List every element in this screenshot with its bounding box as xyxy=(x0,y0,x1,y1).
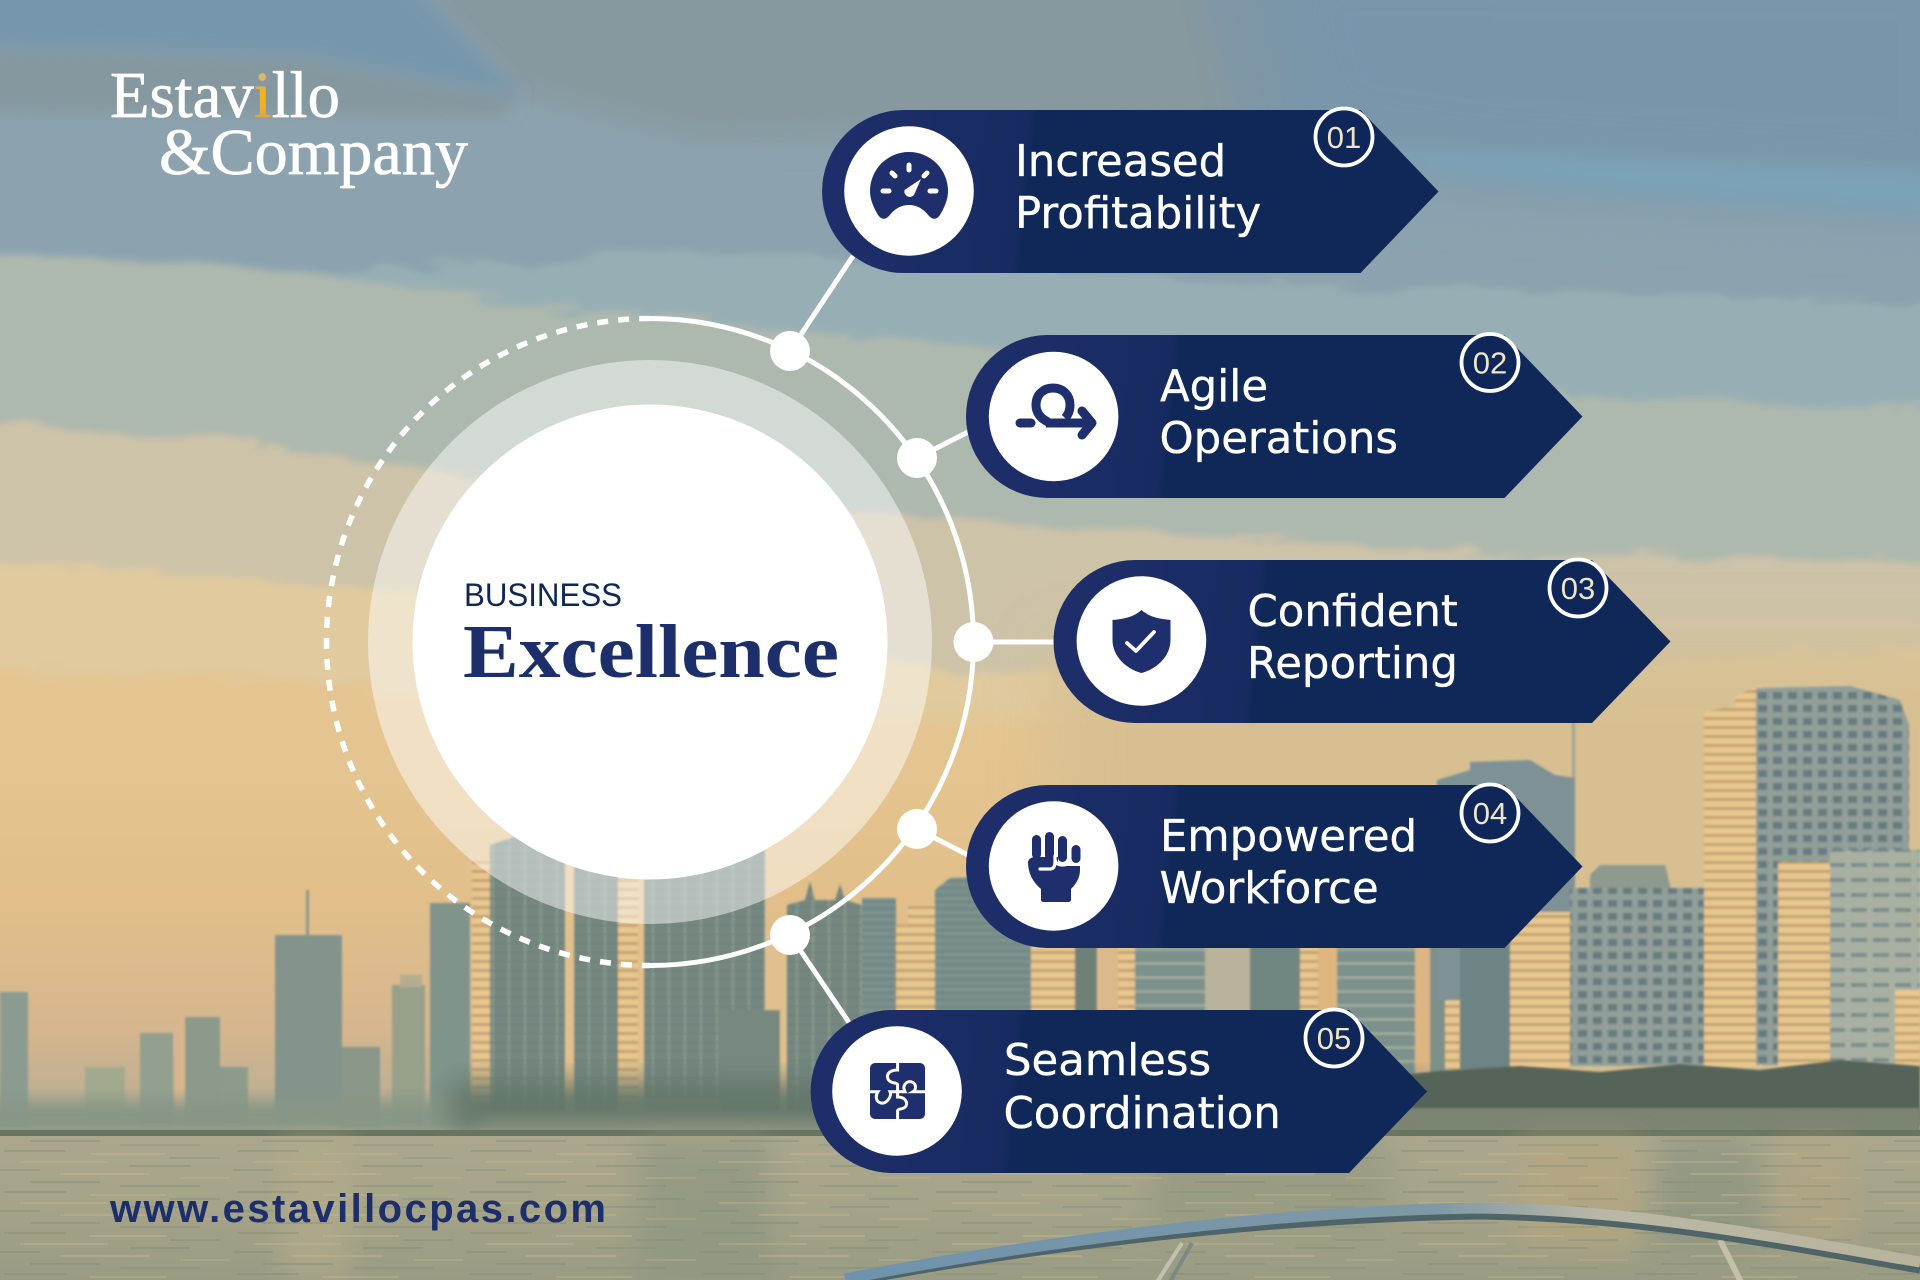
item 02: Agile Operations: Agile xyxy=(1160,362,1268,412)
item 04: Empowered Workforce: Workforce xyxy=(1160,864,1379,914)
item 03: Confident Reporting: Reporting xyxy=(1247,639,1458,689)
badge 02 xyxy=(1462,334,1518,391)
item 02: Agile Operations: Operations xyxy=(1160,414,1398,464)
badge 04 xyxy=(1462,784,1518,842)
skyline left xyxy=(0,835,787,1127)
logo: Estavillo & Company xyxy=(110,59,468,189)
translucent ring xyxy=(368,360,932,924)
hub title: BUSINESS xyxy=(464,577,622,613)
outer dashed arc xyxy=(326,318,650,966)
logo: Estavillo & Company: &Company xyxy=(159,116,468,189)
badge 05: 05 xyxy=(1317,1021,1351,1056)
hub title: Excellence xyxy=(463,610,839,694)
badge 02: 02 xyxy=(1473,346,1507,380)
badge 04: 04 xyxy=(1473,796,1507,831)
skyline centre xyxy=(787,876,1460,1110)
item 04: Empowered Workforce xyxy=(966,784,1582,948)
badge 03: 03 xyxy=(1561,571,1595,606)
logo: Estavillo & Company: Estavillo xyxy=(110,59,340,132)
icon: shield check xyxy=(1112,610,1170,673)
water xyxy=(0,1136,1920,1280)
skyline right xyxy=(1437,684,1920,1075)
connectors and nodes xyxy=(770,256,1056,1024)
boat railing xyxy=(845,1208,1920,1280)
badge 03 xyxy=(1550,560,1606,616)
item 03: Confident Reporting: Confident xyxy=(1248,587,1458,637)
website url: www.estavillocpas.com xyxy=(109,1187,606,1231)
item 02: Agile Operations xyxy=(966,334,1582,498)
icon: raised fist xyxy=(1028,832,1080,902)
icon: agile loop arrow xyxy=(1020,388,1092,435)
item 05: Seamless Coordination: Seamless xyxy=(1004,1036,1211,1086)
outer solid arc xyxy=(650,318,974,966)
white centre circle xyxy=(412,404,888,880)
item 05: Seamless Coordination xyxy=(811,1010,1427,1173)
badge 01: 01 xyxy=(1327,120,1361,155)
badge 01 xyxy=(1316,108,1372,166)
badge 05 xyxy=(1306,1010,1362,1066)
hub: Business Excellence concentric circles xyxy=(326,318,974,966)
item 05: Seamless Coordination: Coordination xyxy=(1004,1089,1281,1139)
shoreline trees xyxy=(0,1060,1920,1137)
hub title xyxy=(463,577,839,694)
icon: speedometer xyxy=(870,152,948,219)
item 01: Increased Profitability xyxy=(822,108,1438,273)
item 03: Confident Reporting xyxy=(1054,560,1670,723)
item 01: Increased Profitability: Profitability xyxy=(1015,189,1261,239)
item 04: Empowered Workforce: Empowered xyxy=(1160,812,1417,862)
icon: puzzle xyxy=(870,1063,925,1119)
item 01: Increased Profitability: Increased xyxy=(1015,137,1226,187)
